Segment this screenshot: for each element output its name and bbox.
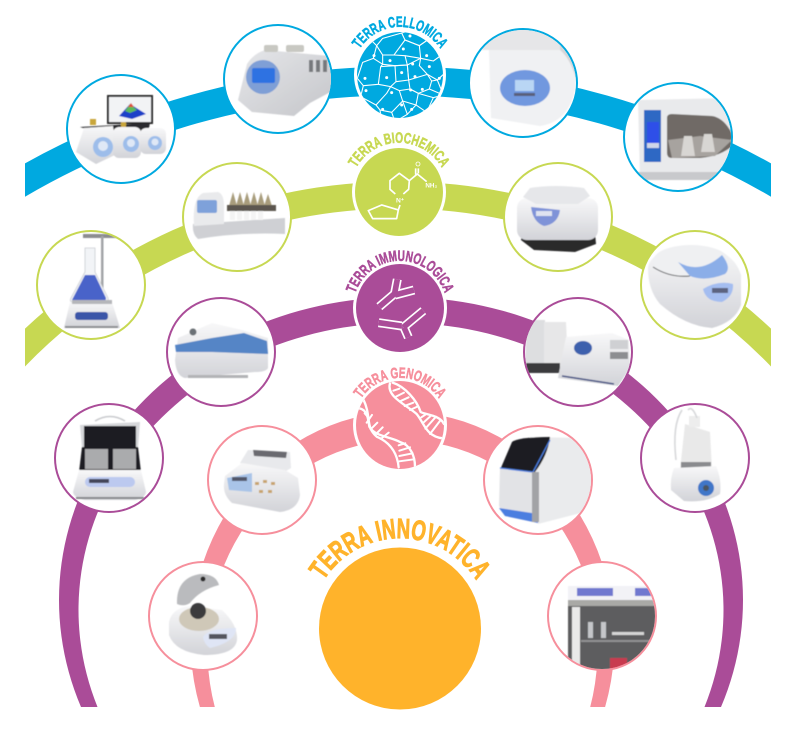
hub: Terra Immunologica [353, 261, 447, 355]
core circle: Terra Innovatica [319, 548, 481, 710]
device: microplate reader [167, 298, 275, 406]
heading: Terra Biochemica: TERRA BIOCHEMICA [347, 132, 450, 168]
heading: Terra Genomica: TERRA GENOMICA [352, 367, 446, 399]
icon: antibodies [379, 279, 423, 337]
device: plate incubator [55, 404, 163, 512]
icon: molecule: NH₂ [425, 182, 437, 189]
device: front panel incubator [468, 28, 578, 137]
device: biosafety cabinet [548, 562, 660, 672]
hub: Terra Biochemica [352, 145, 446, 239]
arc band: Terra Biochemica [10, 195, 786, 363]
device: microcentrifuge with lid [504, 163, 612, 271]
heading: Terra Immunologica: TERRA IMMUNOLOGICA [345, 250, 454, 294]
device: mini centrifuge with dome [149, 562, 257, 670]
device: benchtop centrifuge [641, 231, 749, 339]
device: flask on magnetic stirrer [37, 231, 145, 339]
device: plate washer with bottles [524, 298, 632, 406]
arc band: Terra Immunologica [59, 297, 743, 707]
icon: cell tissue [357, 29, 445, 122]
arc band: Terra Cellomica [10, 81, 786, 189]
icon: molecule: N⁺ [396, 198, 405, 205]
device: sequencer cabinet [484, 426, 592, 534]
device: pumps with laptop [67, 75, 175, 183]
device: shaking incubator [624, 83, 736, 191]
hub: Terra Genomica [353, 378, 447, 472]
device: rounded grey instrument [224, 25, 334, 133]
arc band: Terra Genomica [190, 412, 614, 707]
icon: DNA helix [359, 383, 444, 467]
icon: molecule [368, 162, 437, 219]
device: vacuum bottle [641, 404, 749, 512]
device: tube rotator [183, 163, 291, 271]
hub: Terra Cellomica [354, 29, 446, 122]
heading: Terra Cellomica: TERRA CELLOMICA [351, 16, 448, 49]
device: thermal shaker [208, 426, 316, 534]
heading: Terra Innovatica: TERRA INNOVATICA [307, 518, 490, 581]
